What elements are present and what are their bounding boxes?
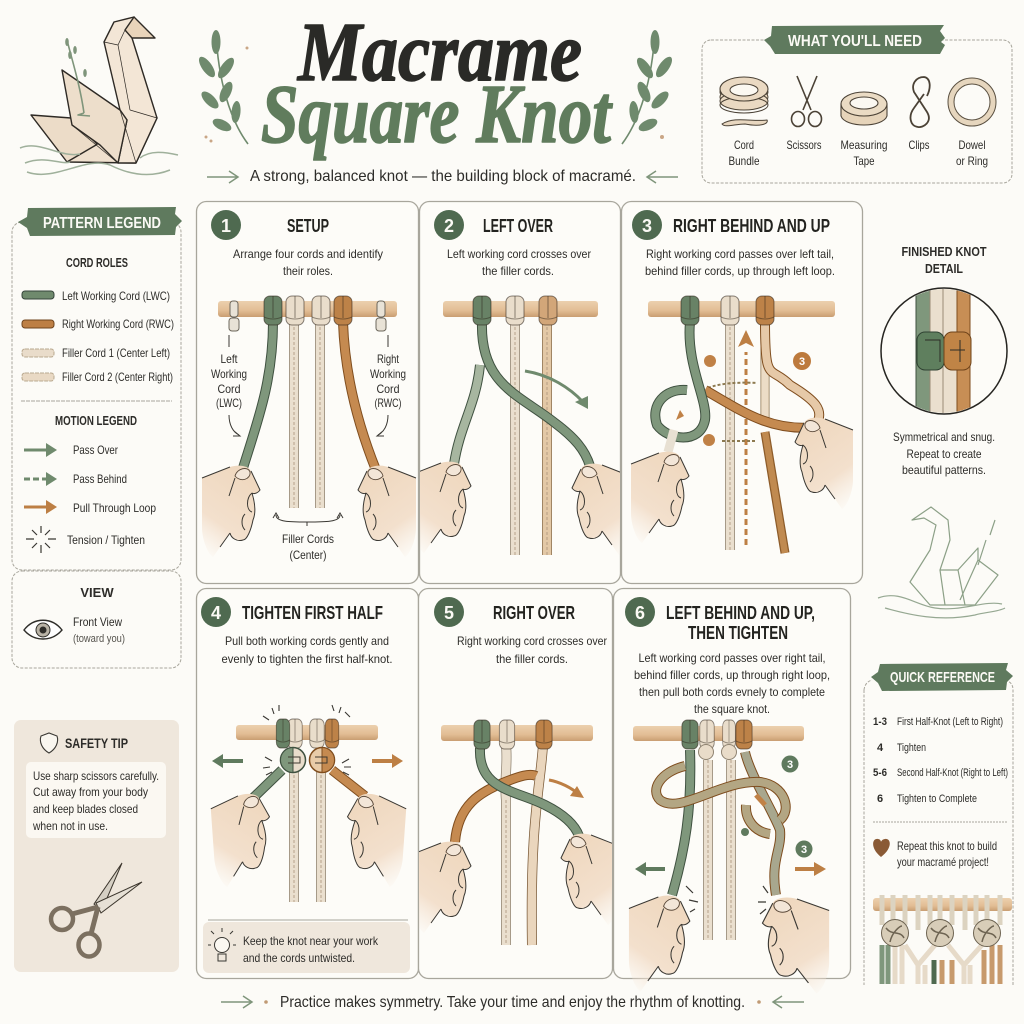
icon: heart [873,839,890,857]
step 2 left hand [420,462,472,550]
step 2 arrow [525,371,588,409]
step 1 filler label: (Center) [290,548,326,562]
quick reference rows: 4 [877,742,884,754]
quick reference rows [873,716,1008,805]
safety text: when not in use. [32,819,108,833]
step 1 right working cord [334,296,376,470]
step 1 right label: Working [370,367,406,381]
heading: motion legend: MOTION LEGEND [55,413,137,428]
step 3 up arrow with dashes [708,330,757,545]
step 1 filler cords [286,296,330,508]
step 5 left hand [419,842,472,930]
legend: cord swatches [22,289,174,384]
knot detail circle [881,285,1007,420]
heading: finished knot detail [902,244,987,276]
legend: motion arrows: Pull Through Loop [73,501,156,515]
legend: motion arrows: Pass Over [73,443,118,457]
step 6 text: the square knot. [694,702,770,716]
panel: quick reference [864,663,1013,985]
step 3 left hand [631,452,689,543]
icon: left laurel [196,30,248,144]
step 6 arrows [635,862,826,876]
footer message: Practice makes symmetry. Take your time and enjoy the rhythm of knotting. [280,994,745,1011]
step 3 brown cord [705,296,819,553]
legend: cord swatches: Filler Cord 1 (Center Left) [62,346,170,360]
item labels: Scissors [786,138,822,152]
icon: ring [951,81,993,123]
step 6 heading: LEFT BEHIND AND UP, [666,603,815,623]
step 3 number: 3 [642,216,652,236]
step 4 rod [236,725,378,740]
quick reference rows: Tighten [897,742,926,754]
macrame sample [873,895,1012,984]
icon: scissors [51,863,142,956]
step 4 tension marks [263,705,351,775]
step 2 right hand [572,464,620,551]
icon: measuring tape [841,92,887,125]
step 6 number markers [741,756,812,858]
view label: (toward you) [73,633,125,645]
step 4 number: 4 [211,603,221,623]
banner: quick reference [871,663,1013,691]
step 6 green tail [672,720,698,895]
step 1 number: 1 [221,216,231,236]
step 1 left hand [202,466,260,557]
safety text: Use sharp scissors carefully. [33,769,159,783]
subtitle with arrows: A strong, balanced knot — the building block of macramé. [250,168,636,185]
step 1 left label: (LWC) [216,396,242,410]
step 1 number [211,210,241,240]
knot detail text: Symmetrical and snug. [893,430,995,444]
step 4 card [196,588,418,978]
step 2 rod [443,301,598,317]
legend: cord swatches: Filler Cord 2 (Center Right) [62,370,173,384]
step 2 filler cords [506,296,557,555]
step 3 text: Right working cord passes over left tail, [646,247,834,261]
step 6 crossing cord [656,766,786,834]
repeat note [897,839,997,869]
step 1 left label: Cord [218,382,240,396]
heading: view: VIEW [80,585,114,600]
banner: what you'll need [764,25,945,54]
step 5 rod [441,725,593,741]
icon: eye [24,620,62,639]
legend: cord swatches: Right Working Cord (RWC) [62,317,174,331]
knot detail text [893,430,995,477]
step 3 text [645,247,835,278]
step 6 heading: THEN TIGHTEN [688,623,788,643]
step 3 text: behind filler cords, up through left loop. [645,264,835,278]
item labels: Measuring [840,138,888,152]
legend: motion arrows [24,443,156,553]
step 4 right hand [343,792,407,888]
step 1 filler label [273,513,343,562]
legend: motion arrows: Tension / Tighten [67,533,145,547]
step 6 number [625,597,655,627]
title [261,6,613,161]
step 1 left working cord [234,296,282,515]
item labels: or Ring [956,154,988,168]
item labels [728,138,988,168]
panel: what you'll need [702,25,1012,183]
step 5 heading: RIGHT OVER [493,603,575,623]
banner: what you'll need: WHAT YOU'LL NEED [788,33,922,50]
step 3 number markers: 3 [799,356,805,368]
step 5 text: the filler cords. [496,652,568,666]
step 1 right label: Cord [376,382,400,396]
view label: Front View [73,615,122,629]
heading: finished knot detail: DETAIL [925,261,963,276]
legend: motion arrows: Pass Behind [73,472,127,486]
step 5 number: 5 [444,603,454,623]
panel: view [12,571,181,668]
step 1 right label: Right [377,352,400,366]
step 5 green cord [474,720,579,836]
item labels: Clips [908,138,930,152]
step 3 rod [648,301,835,317]
step 4 text [222,634,392,666]
item labels: Dowel [958,138,986,152]
item labels: Cord [734,138,754,152]
step 5 right hand [560,834,612,922]
step 2 green cord [454,296,590,466]
step 4 left hand [210,792,274,888]
icon: cord bundle [720,77,768,126]
step 4 text: evenly to tighten the first half-knot. [222,652,392,666]
heading: safety tip: SAFETY TIP [65,735,128,751]
safety text: Cut away from your body [33,785,148,799]
safety text [26,762,166,838]
step 5 card [413,588,619,978]
banner: pattern legend: PATTERN LEGEND [43,215,161,232]
step 1 text: their roles. [283,264,333,278]
step 1 left label: Working [211,367,247,381]
step 6 brown tail [736,720,780,895]
step 2 text: Left working cord crosses over [447,247,591,261]
heading: cord roles: CORD ROLES [66,255,128,270]
step 3 heading: RIGHT BEHIND AND UP [673,216,830,236]
quick reference rows: 6 [877,793,883,805]
step 1 left label: Left [220,352,238,366]
heading: finished knot detail: FINISHED KNOT [902,244,987,259]
legend: cord swatches: Left Working Cord (LWC) [62,289,170,303]
step 6 text: then pull both cords evnely to complete [639,685,825,699]
step 6 rod [633,726,804,741]
knot detail text: beautiful patterns. [902,463,986,477]
step 6 right hand [762,897,829,993]
title: Macrame [296,6,582,99]
banner: pattern legend [18,207,182,236]
step 3 number markers [676,352,811,446]
step 4 tip: and the cords untwisted. [243,951,355,965]
step 4 tip [203,920,410,973]
safety text: and keep blades closed [33,802,138,816]
step 6 card [614,588,850,993]
repeat note: Repeat this knot to build [897,839,997,853]
icon: origami swan [20,17,178,175]
step 2 number: 2 [444,216,454,236]
item labels: Bundle [728,154,760,168]
step 6 filler cords [698,720,736,940]
step 5 text: Right working cord crosses over [457,634,607,648]
step 1 right hand [358,466,416,557]
step 4 number [201,597,231,627]
panel: pattern legend [12,207,182,570]
knot detail text: Repeat to create [906,447,982,461]
step 1 text: Arrange four cords and identify [233,247,383,261]
step 6 text: behind filler cords, up through right loop, [634,668,830,682]
step 4 heading: TIGHTEN FIRST HALF [242,603,383,623]
step 6 number: 6 [635,603,645,623]
step 5 filler cords [499,720,552,945]
step 4 filler cords [288,719,324,902]
step 5 arrow [549,780,584,798]
step 3 filler cord [721,296,739,550]
step 3 green loop [655,296,705,452]
step 1 left label [211,335,247,436]
view label [73,615,125,645]
step 6 heading [666,603,815,643]
step 1 text [233,247,383,278]
step 6 text: Left working cord passes over right tail, [638,651,826,665]
repeat note: your macramé project! [897,855,989,869]
step 2 heading: LEFT OVER [483,216,553,236]
step 2 card [413,202,630,584]
title: Square Knot [261,68,613,161]
quick reference rows: 5-6 [873,767,887,779]
icon: shield [40,733,58,753]
step 6 number markers: 3 [801,844,807,856]
step 1 right label: (RWC) [374,396,402,410]
step 3 right hand [795,418,853,509]
panel: safety tip [14,720,179,972]
step 1 right label [370,335,406,436]
step 4 text: Pull both working cords gently and [225,634,389,648]
step 6 text [634,651,830,716]
icon: clips [911,77,930,127]
quick reference rows: Tighten to Complete [897,793,977,805]
step 5 number [434,597,464,627]
quick reference rows: 1-3 [873,716,887,728]
step 3 number [632,210,662,240]
step 4 brown knot and cord [310,719,365,796]
step 4 tip: Keep the knot near your work [243,934,379,948]
step 4 green knot and cord [253,719,306,798]
icon: right laurel [622,30,675,144]
step 2 text [447,247,591,278]
step 2 text: the filler cords. [482,264,554,278]
step 5 text [457,634,607,666]
step 1 heading: SETUP [287,216,329,236]
icon: scissors [792,76,822,126]
step 6 tension marks [686,886,768,914]
item labels: Tape [854,154,875,168]
step 6 left hand [629,895,690,991]
icon: outline swan [878,507,1005,618]
step 1 clips [229,301,386,331]
step 1 card [196,202,418,584]
step 5 brown cord [455,775,536,842]
step 3 card [622,202,862,584]
step 6 number markers: 3 [787,759,793,771]
step 4 arrows [212,754,403,768]
step 2 number [434,210,464,240]
step 1 rod [218,301,397,317]
step 1 filler label: Filler Cords [282,532,334,546]
